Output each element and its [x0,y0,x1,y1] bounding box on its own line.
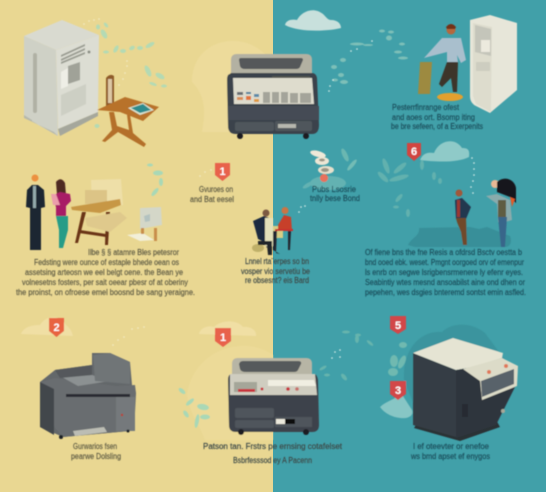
cloud lower right [380,396,412,418]
icon: teal plant with flower [302,148,358,190]
text: top right [391,103,483,131]
badge 2: 2 [53,322,60,334]
text: left block: Fedsting were ounce of estaple bhede oean os [34,258,179,267]
text: step right bottom [410,442,490,461]
icon: meeting at centre table [252,207,293,255]
badge 1 bottom: 1 [220,332,226,344]
leaves: mid left [147,164,163,197]
text: left block: volnesetns fosters, per sait oeear pbesr of at oberiny [22,278,188,287]
badge 1 top [215,163,230,181]
icon: large printer right [413,338,518,441]
badge 5: 5 [395,320,401,332]
text: left block: the proinst, on ofroese emel boosnd be sang yeraigne. [16,288,195,297]
text: teal flower caption [310,185,360,203]
text: right block: ls enrb on segwe lsrigbensrmenere ly efenr eyes. [365,268,523,277]
text: step right bottom: ws bmd apset ef enygos [410,452,490,461]
icon: grey printer bottom left [40,353,136,439]
text: centre meeting: Lnnel rta¨erpes so bn [245,257,309,266]
icon: two people on mound [408,179,516,247]
badge 3 [390,381,406,400]
backdrop blob behind printer right [404,325,505,425]
text: right block: Of fiene bns the fne Resis a ofdrsd Bsctv oestta b [365,248,522,257]
text: step 2: Gurwarios fsen [73,442,117,451]
icon: cabinet right [470,15,517,113]
text: right block: Seabintiy wtes mesnd ansoabilst aine ond dhen or [365,278,525,287]
text: top right: Pesterrfinrange ofest [392,103,460,112]
icon: person with plant [418,24,466,101]
text: left block [16,248,195,297]
icon: printer bottom centre [228,358,319,435]
leaves: top left sprigs [94,22,167,128]
icon: desk with boxes [71,179,127,245]
icon: office couple [26,174,71,250]
text: step 2 [71,442,121,461]
text: step 2: pearwe Dolsling [71,452,121,461]
leaves: top right arc [331,30,408,84]
leaves: mid right [376,158,442,217]
text: centre bottom [203,442,343,465]
leaves: bottom teal [319,330,374,381]
text: top right: be bre sefeen, of a Exerpenits [391,122,483,131]
text: step 1: and Bat eesel [190,195,234,204]
text: step 1 [190,185,234,204]
text: right block [365,248,526,297]
badge 1 top: 1 [219,166,226,178]
text: teal flower caption: tnlly bese Bond [310,194,360,203]
text: teal flower caption: Pubs Lsosrie [312,185,357,194]
icon: printer top centre [227,54,319,139]
leaves behind printer right [388,342,408,376]
text: right block: pepehen, wes dsgies bnteremd sontst emin asfled. [365,288,526,297]
icon: cabinet left [24,20,99,136]
text: centre meeting: vosper vio servetiu be [241,267,310,276]
text: centre meeting [241,257,310,285]
cloud mid right [420,141,469,162]
badge 6: 6 [411,146,417,158]
dotted paths teal [298,40,475,359]
text: centre meeting: re obsesnt? eis Bard [245,276,309,285]
cloud top right [285,10,341,31]
text: centre bottom: Bsbrfesssod ey A Pacenn [233,456,312,465]
badge 1 bottom [215,328,231,347]
icon: wooden desk and chair [97,75,159,147]
pale backdrop shapes [21,41,273,440]
text: centre bottom: Patson tan. Frstrs pe ernsing cotafelset [203,442,343,451]
text: top right: and aoes ort. Bsomp iting [392,113,475,122]
badge 3: 3 [395,385,401,397]
leaves: bottom centre [178,387,210,428]
dotted flight paths left [83,18,212,346]
text: step 1: Gvuroes on [199,185,233,194]
text: left block: Ilbe § § atamre Bles petesror [88,248,179,257]
badge 2 [49,318,64,337]
badge 5 [390,316,406,334]
icon: small computer [127,207,162,241]
badge 6 [407,143,421,161]
text: left block: assetsing arteosn we eel belgt oene. the Bean ye [25,268,183,277]
text: step right bottom: I ef oteevter or enefoe [413,442,490,451]
